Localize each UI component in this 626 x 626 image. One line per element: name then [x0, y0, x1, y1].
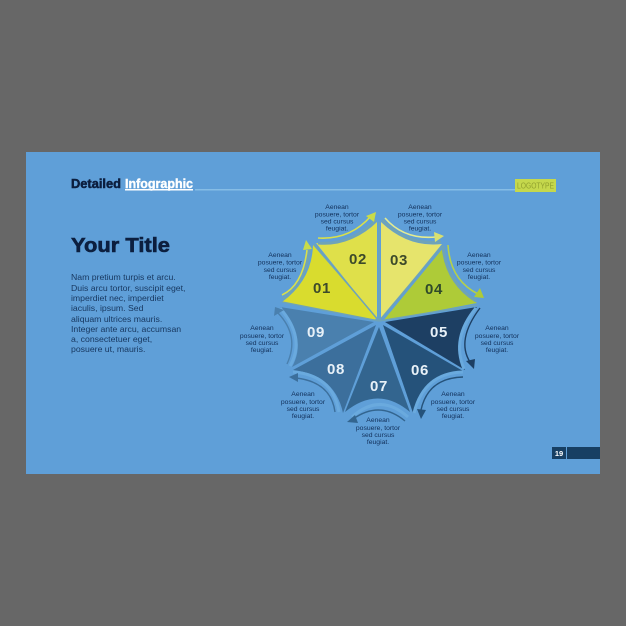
- caption: segment 07: feugiat.: [367, 439, 389, 446]
- caption: segment 01: Aenean: [268, 252, 292, 259]
- centre hub: [375, 317, 383, 325]
- body text: [71, 272, 185, 354]
- segment 02: 02: [349, 251, 367, 268]
- body text: Integer ante arcu, accumsan: [71, 324, 181, 334]
- segment 09: [280, 307, 374, 367]
- caption: segment 02: feugiat.: [326, 226, 348, 232]
- segment 06: [383, 325, 463, 413]
- caption: segment 03: Aenean: [408, 204, 432, 211]
- segment 09: 09: [307, 324, 325, 341]
- body text: a, consectetuer eget,: [71, 334, 152, 344]
- caption: segment 03: feugiat.: [409, 226, 431, 232]
- caption: segment 08: feugiat.: [292, 413, 314, 420]
- title: Your Title: [71, 235, 170, 257]
- logo badge: [515, 179, 556, 192]
- segment 05: 05: [430, 324, 448, 341]
- caption: segment 07: posuere, tortor: [356, 425, 401, 432]
- arrow: segment 03: [382, 218, 444, 243]
- spokes: [282, 222, 477, 321]
- segment 08: 08: [327, 361, 345, 378]
- segment 07: [345, 327, 410, 412]
- arrow: segment 07: [347, 404, 408, 423]
- body text: imperdiet nec, imperdiet: [71, 293, 164, 303]
- page number: 19: [555, 449, 563, 458]
- caption: segment 05: sed cursus: [481, 340, 514, 347]
- caption: segment 05: feugiat.: [486, 347, 508, 354]
- chart: nine segment radial diagram: [280, 222, 477, 413]
- arrow: segment 09: [274, 307, 296, 366]
- body text: posuere ut, mauris.: [71, 344, 145, 354]
- caption: segment 05: posuere, tortor: [475, 333, 520, 340]
- segment 01: [282, 245, 379, 321]
- caption: segment 06: Aenean: [441, 391, 465, 398]
- segment 04: [383, 247, 477, 321]
- arrow: segment 01: [282, 240, 312, 299]
- caption: segment 06: feugiat.: [442, 413, 464, 420]
- caption: segment 06: sed cursus: [437, 406, 470, 413]
- segment 06: 06: [411, 362, 429, 379]
- caption: segment 09: Aenean: [250, 325, 274, 332]
- arrow: segment 08: [289, 372, 339, 412]
- heading: Detailed Infographic: Detailed: [71, 176, 121, 191]
- segment 01: 01: [313, 280, 331, 297]
- caption: segment 08: Aenean: [291, 391, 315, 398]
- caption: segment 09: posuere, tortor: [240, 333, 285, 340]
- caption: segment 04: Aenean: [467, 252, 491, 259]
- caption: segment 01: sed cursus: [264, 267, 297, 274]
- caption: segment 04: sed cursus: [463, 267, 496, 274]
- arrow: segment 04: [443, 245, 484, 301]
- segment 07: 07: [370, 378, 388, 395]
- body text: aliquam ultrices mauris.: [71, 314, 162, 324]
- page number: [552, 447, 600, 459]
- caption: segment 02: sed cursus: [321, 218, 354, 226]
- caption: segment 02: posuere, tortor: [315, 212, 360, 218]
- logo badge: LOGOTYPE: [517, 182, 554, 190]
- segment 03: [381, 222, 442, 319]
- caption: segment 08: posuere, tortor: [281, 399, 326, 406]
- arrow: segment 06: [414, 372, 463, 419]
- heading: Detailed Infographic: [71, 176, 193, 191]
- segment 03: 03: [390, 252, 408, 269]
- arrow: segment 05: [460, 308, 480, 369]
- caption: segment 08: sed cursus: [287, 406, 320, 413]
- caption: segment 01: feugiat.: [269, 274, 291, 281]
- segment 05: [385, 307, 477, 370]
- panel: slide background: [26, 152, 600, 474]
- body text: Nam pretium turpis et arcu.: [71, 272, 176, 282]
- caption: segment 03: sed cursus: [404, 218, 437, 226]
- arrow: segment 02: [318, 212, 376, 243]
- caption: segment 07: sed cursus: [362, 432, 395, 439]
- caption: segment 07: Aenean: [366, 417, 390, 424]
- caption: segment 09: feugiat.: [251, 347, 273, 354]
- caption: segment 05: Aenean: [485, 325, 509, 332]
- heading: Detailed Infographic: Infographic: [125, 176, 193, 191]
- segment 04: 04: [425, 281, 443, 298]
- caption: segment 03: posuere, tortor: [398, 212, 443, 218]
- caption: segment 01: posuere, tortor: [258, 260, 303, 266]
- segment 08: [293, 325, 376, 413]
- body text: Duis arcu tortor, suscipit eget,: [71, 283, 185, 293]
- body text: iaculis, ipsum. Sed: [71, 303, 144, 313]
- caption: segment 04: posuere, tortor: [457, 260, 502, 266]
- caption: segment 02: Aenean: [325, 204, 349, 211]
- caption: segment 04: feugiat.: [468, 274, 490, 281]
- caption: segment 06: posuere, tortor: [431, 399, 476, 406]
- segment 02: [316, 222, 377, 319]
- caption: segment 09: sed cursus: [246, 340, 279, 347]
